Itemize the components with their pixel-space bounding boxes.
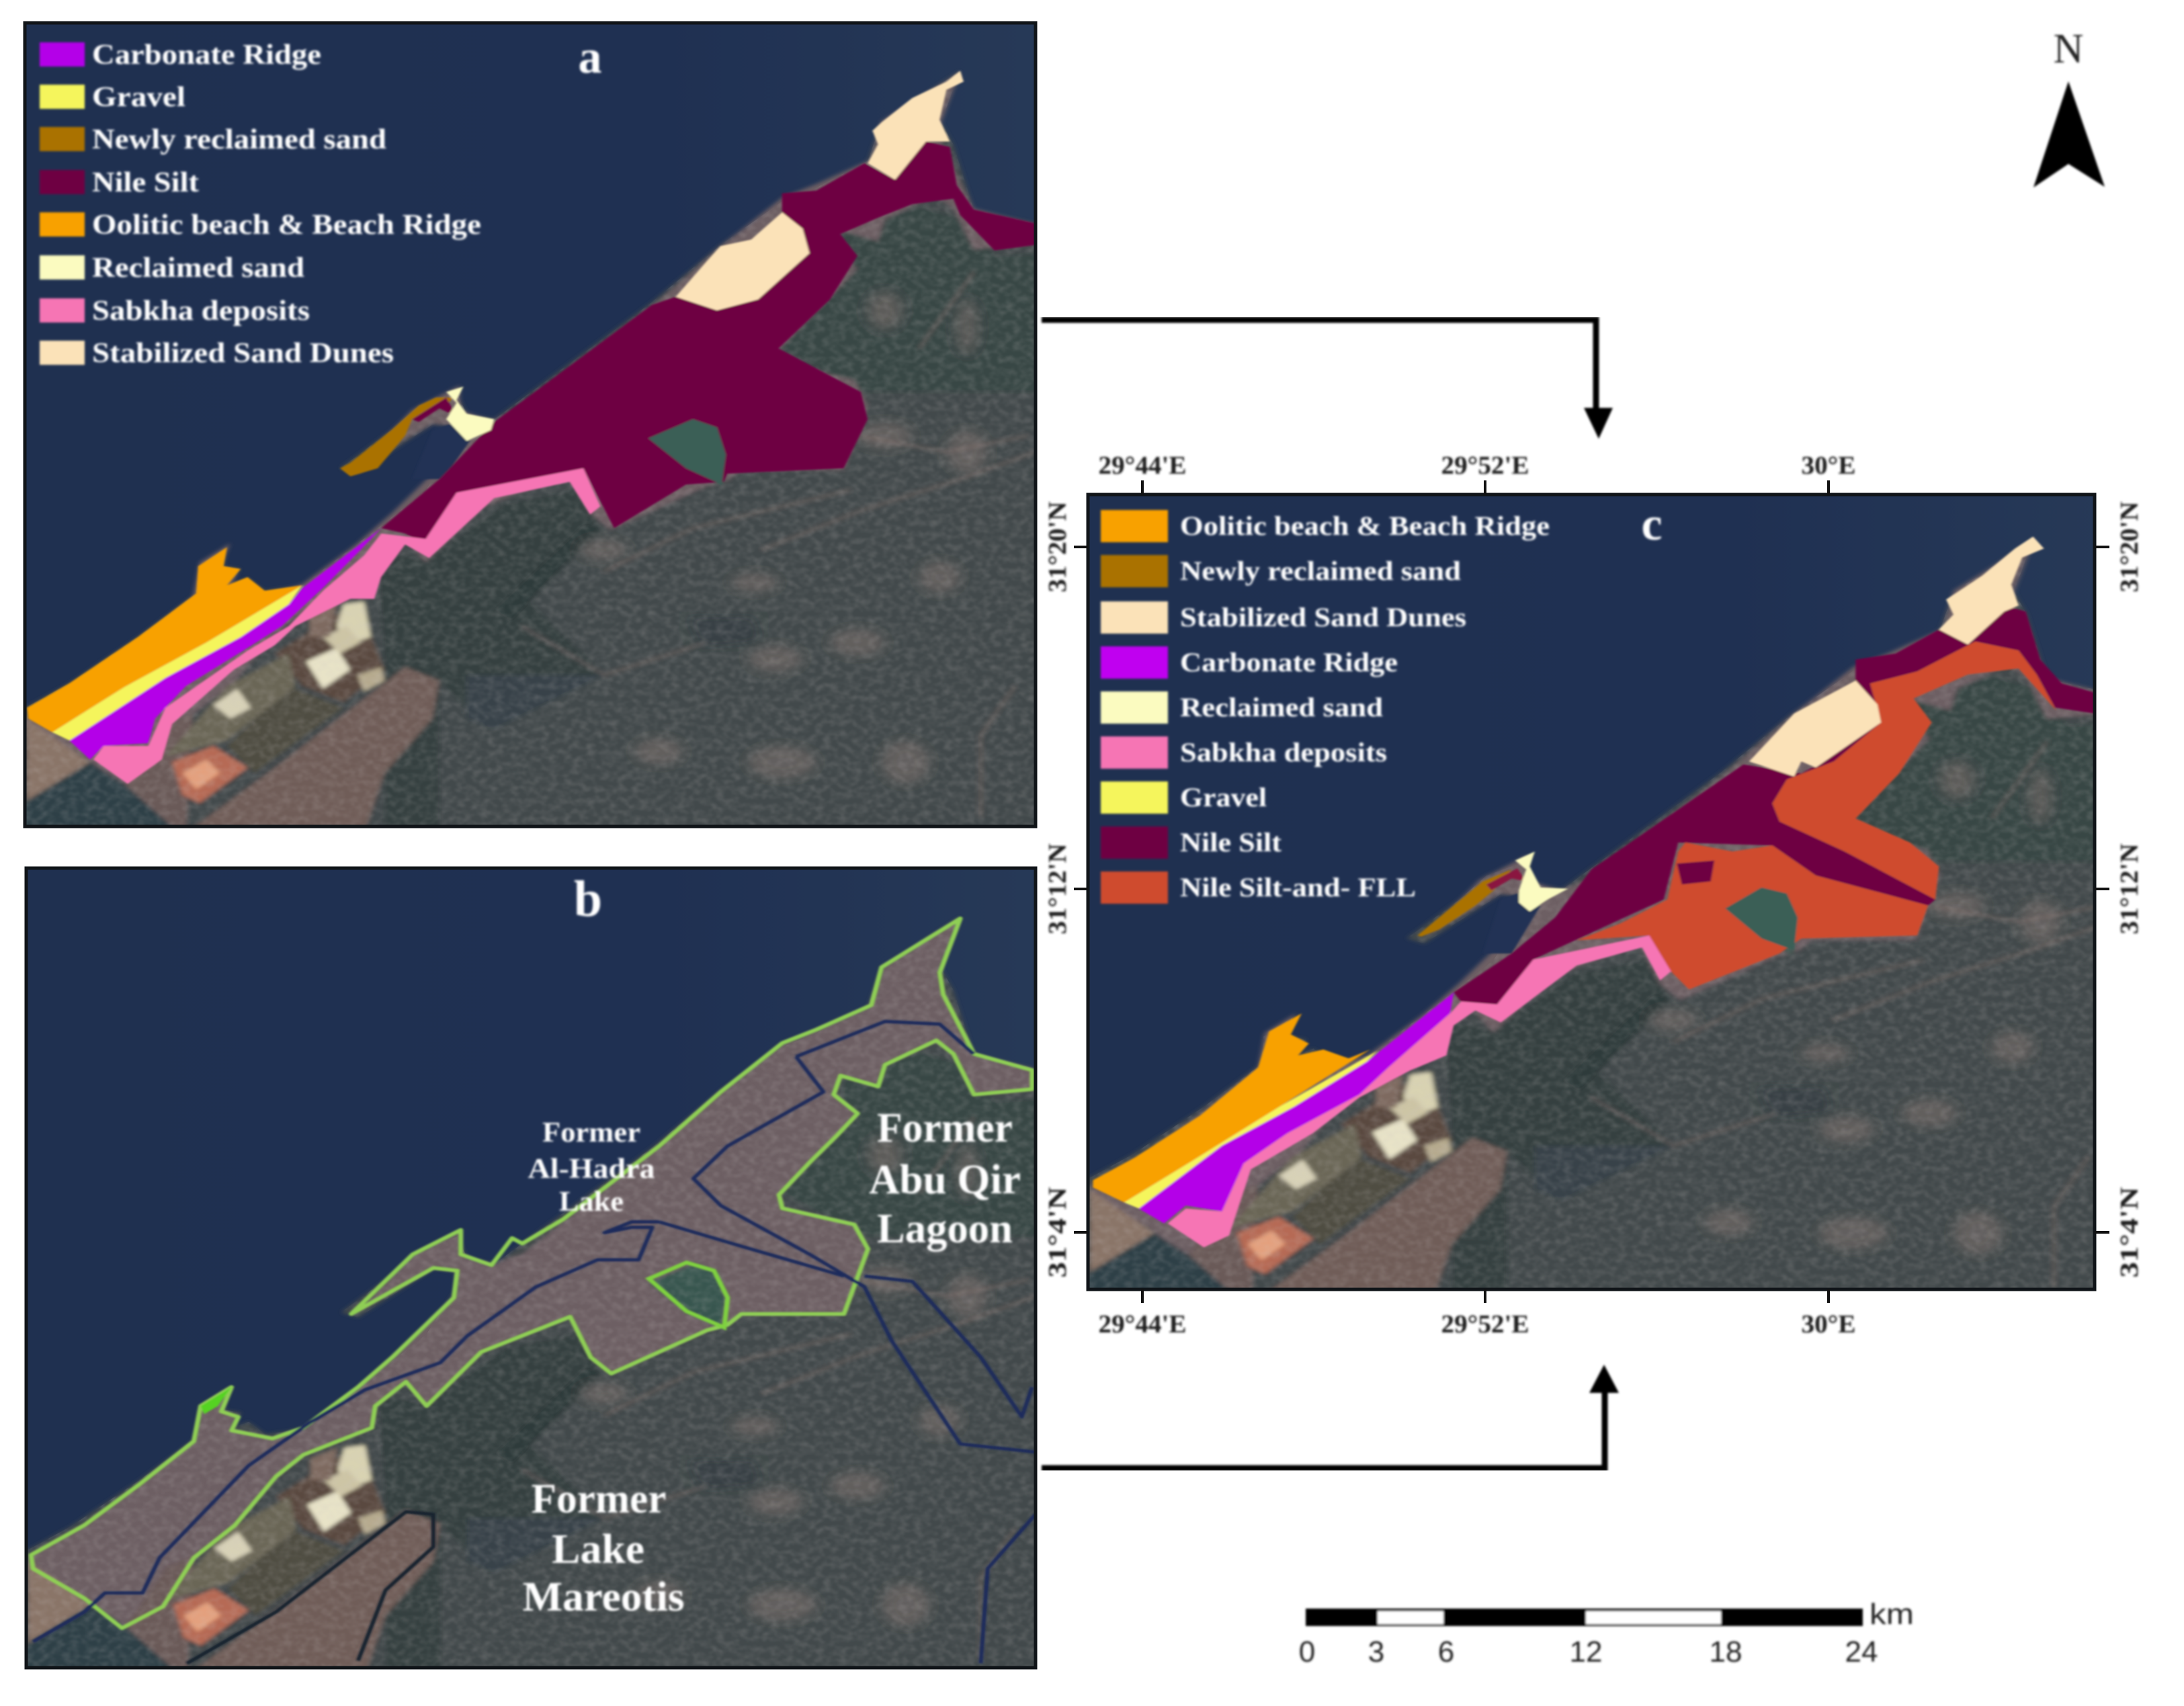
legend a: [40, 40, 481, 369]
panel border: [1088, 495, 2095, 1289]
legend row: Nile Silt: [40, 167, 199, 198]
panel border: [25, 23, 1036, 826]
top longitude labels: 29°44'E: [1098, 452, 1187, 480]
scale numbers: [1299, 1635, 1878, 1668]
map unit: Nile Silt and FLL lower: [1577, 843, 1928, 990]
legend row: Reclaimed sand: Reclaimed sand: [92, 253, 304, 284]
scale numbers: 6: [1438, 1635, 1454, 1668]
map unit: Reclaimed sand: [446, 386, 494, 441]
former lake boundaries: [33, 1021, 1036, 1664]
panel label c: c: [1641, 499, 1663, 550]
map unit: Nile Silt and FLL upper: [1772, 642, 2056, 900]
left latitude labels: 31°4'N: [1044, 1187, 1072, 1278]
scale unit: km: [1870, 1598, 1914, 1631]
label: Former Lake Mareotis: Lake: [552, 1527, 644, 1572]
label: Former Lake Mareotis: [523, 1476, 684, 1620]
top longitude labels: 30°E: [1801, 452, 1856, 480]
panel label b: b: [574, 871, 602, 927]
scale numbers: 24: [1845, 1635, 1878, 1668]
harbor water: [1482, 890, 1541, 953]
legend row: Gravel: Gravel: [92, 82, 185, 113]
label: Former Al-Hadra Lake: Al-Hadra: [528, 1154, 655, 1185]
right latitude labels: 31°20'N: [2115, 501, 2144, 593]
legend row: Newly reclaimed sand: [1101, 555, 1461, 587]
label: Former Al-Hadra Lake: Former: [542, 1117, 640, 1148]
map unit: Stabilized Sand Dunes: [676, 71, 964, 310]
map unit: Carbonate Ridge: [69, 528, 381, 759]
map unit: Carbonate Ridge: [1138, 992, 1454, 1224]
scale numbers: 12: [1570, 1635, 1602, 1668]
bottom longitude labels: 29°52'E: [1441, 1310, 1529, 1338]
panel border: [26, 868, 1036, 1668]
label: Former Lake Mareotis: Mareotis: [523, 1574, 684, 1620]
legend row: Sabkha deposits: Sabkha deposits: [92, 296, 310, 327]
label: Former Abu Qir Lagoon: Abu Qir: [869, 1157, 1021, 1203]
scale numbers: 3: [1368, 1635, 1384, 1668]
map unit: Nile Silt: [381, 142, 1036, 544]
left latitude labels: 31°20'N: [1044, 501, 1072, 593]
graticule ticks: [1074, 480, 2109, 1303]
legend row: Nile Silt: Nile Silt: [92, 167, 199, 198]
legend row: Oolitic beach: Oolitic beach & Beach Ridge: [92, 210, 481, 241]
map unit: small silt strip: [412, 397, 456, 422]
scale numbers: 0: [1299, 1635, 1315, 1668]
arrow: panel b to panel c: [1042, 1365, 1619, 1468]
left latitude labels: [1044, 501, 1072, 1278]
label: Former Al-Hadra Lake: Lake: [559, 1187, 624, 1218]
bottom longitude labels: 29°44'E: [1098, 1310, 1187, 1338]
legend row: Reclaimed sand: [1101, 691, 1383, 724]
legend row: Newly reclaimed sand: Newly reclaimed sand: [1180, 556, 1461, 586]
right latitude labels: [2115, 501, 2144, 1278]
map unit: Reclaimed sand: [1515, 851, 1568, 912]
legend row: Sabkha deposits: Sabkha deposits: [1180, 737, 1387, 767]
north arrow: [2033, 26, 2105, 187]
map unit: Sabkha deposits: [93, 468, 601, 784]
green bright coast accents: [201, 1387, 231, 1414]
top longitude labels: [1098, 452, 1856, 480]
legend row: Stabilized Sand Dunes: Stabilized Sand Dunes: [1180, 602, 1466, 632]
legend row: Stabilized Sand Dunes: [1101, 601, 1466, 634]
label: Former Al-Hadra Lake: [528, 1117, 655, 1218]
panel b: former lakes map: [0, 836, 1111, 1706]
legend c: [1101, 510, 1550, 904]
bottom longitude labels: 30°E: [1801, 1310, 1856, 1338]
legend row: Oolitic beach: [1101, 510, 1550, 542]
legend row: Reclaimed sand: Reclaimed sand: [1180, 692, 1383, 722]
label: Former Abu Qir Lagoon: Lagoon: [877, 1206, 1013, 1252]
map unit: Gravel: [52, 585, 302, 740]
legend row: Oolitic beach: Oolitic beach & Beach Ridge: [1180, 511, 1550, 541]
legend row: Carbonate Ridge: Carbonate Ridge: [92, 40, 321, 71]
right latitude labels: 31°12'N: [2115, 844, 2144, 934]
map unit: Oolitic beach and beach ridge: [1093, 1013, 1370, 1203]
study area outline: [31, 919, 1032, 1628]
top longitude labels: 29°52'E: [1441, 452, 1529, 480]
map unit: Nile Silt: [1454, 605, 2095, 1005]
graticule labels: [1044, 452, 2144, 1338]
label: Former Abu Qir Lagoon: Former: [877, 1105, 1013, 1151]
map unit: Newly reclaimed sand: [1417, 869, 1511, 937]
map unit: lake: [1725, 888, 1798, 951]
legend row: Nile Silt-and- FLL: [1101, 871, 1416, 904]
bottom longitude labels: [1098, 1310, 1856, 1338]
map unit: lake inside silt: [648, 419, 726, 484]
legend row: Stabilized Sand Dunes: Stabilized Sand Dunes: [92, 338, 394, 369]
map unit: Oolitic beach and beach ridge: [27, 547, 302, 732]
scale bar: [1299, 1598, 1914, 1668]
north arrow: N: [2054, 26, 2083, 72]
map unit: Stabilized Sand Dunes: [1749, 536, 2044, 777]
map unit: Newly reclaimed sand: [340, 397, 453, 476]
left latitude labels: 31°12'N: [1044, 844, 1072, 934]
label: Former Abu Qir Lagoon: [869, 1105, 1021, 1252]
lake outline: [649, 1263, 728, 1328]
right latitude labels: 31°4'N: [2115, 1187, 2144, 1278]
legend row: Nile Silt-and- FLL: Nile Silt-and- FLL: [1180, 872, 1416, 902]
legend row: Newly reclaimed sand: Newly reclaimed sand: [92, 124, 386, 155]
legend row: Nile Silt: Nile Silt: [1180, 827, 1282, 857]
panel label a: a: [578, 32, 602, 83]
panel a: geomorphology map: [0, 0, 1111, 882]
map unit: small silt strip: [1486, 868, 1526, 890]
arrow: panel a to panel c: [1042, 320, 1613, 439]
label: Former Lake Mareotis: Former: [531, 1476, 667, 1522]
legend row: Gravel: [40, 82, 185, 113]
map unit: Sabkha deposits: [1168, 935, 1671, 1248]
legend row: Nile Silt: [1101, 826, 1282, 859]
legend row: Gravel: [1101, 781, 1267, 814]
scale numbers: 18: [1710, 1635, 1742, 1668]
map unit: Gravel: [1124, 1051, 1378, 1208]
scale bar segments: [1306, 1609, 1863, 1626]
legend row: Gravel: Gravel: [1180, 782, 1267, 812]
panel c: combined map: [1044, 452, 2184, 1353]
legend row: Sabkha deposits: [1101, 736, 1387, 769]
legend row: Carbonate Ridge: [1101, 646, 1398, 679]
harbor water: [412, 422, 474, 479]
legend row: Carbonate Ridge: Carbonate Ridge: [1180, 647, 1398, 677]
map unit: silt blob: [1677, 861, 1714, 884]
